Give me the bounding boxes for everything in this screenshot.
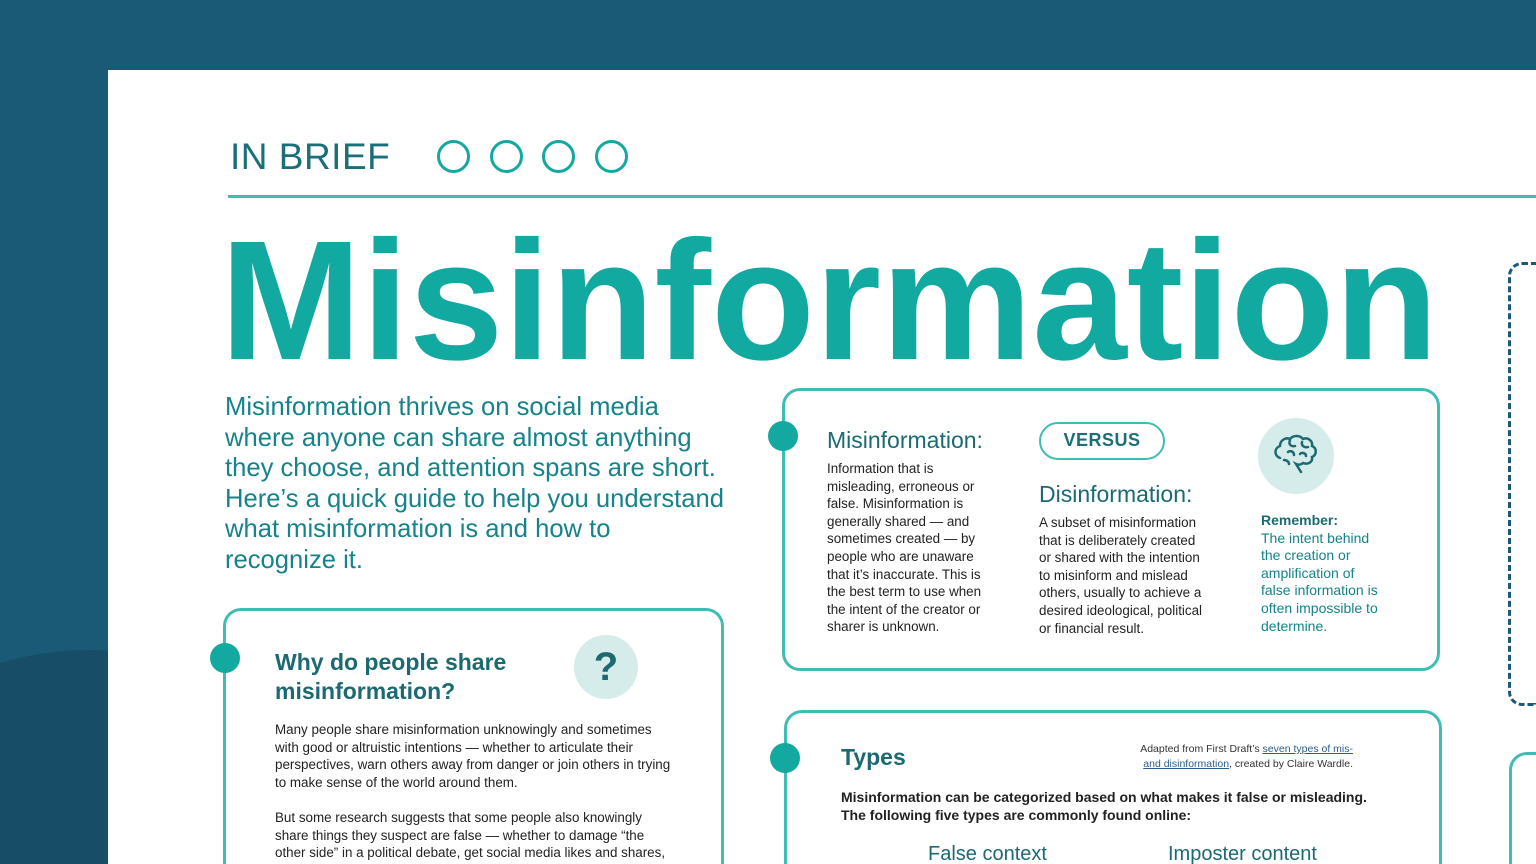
versus badge: VERSUS bbox=[1063, 430, 1141, 450]
disinformation definition: desired ideological, political bbox=[1039, 603, 1202, 618]
remember note: amplification of bbox=[1261, 565, 1354, 581]
header: in brief: IN BRIEF bbox=[230, 136, 390, 177]
misinformation definition: generally shared — and bbox=[827, 514, 969, 529]
text: other side” in a political debate, get social media likes and shares, bbox=[275, 845, 665, 860]
text: share things they suspect are false — whether to damage “the bbox=[275, 828, 644, 843]
panel: types bbox=[784, 710, 1442, 864]
text: Many people share misinformation unknowingly and sometimes bbox=[275, 722, 652, 737]
disinformation definition: or financial result. bbox=[1039, 621, 1144, 636]
intro: The following five types are commonly found online: bbox=[841, 807, 1191, 823]
misinformation definition: Misinformation: bbox=[827, 427, 983, 453]
misinformation definition: sometimes created — by bbox=[827, 531, 975, 546]
intro text: recognize it. bbox=[225, 546, 363, 574]
remember note: often impossible to bbox=[1261, 600, 1378, 616]
heading: Types bbox=[841, 744, 906, 770]
source note: and disinformation, created by Claire Wardle. bbox=[1143, 758, 1353, 770]
text: But some research suggests that some people also knowingly bbox=[275, 810, 642, 825]
misinformation definition bbox=[827, 427, 983, 634]
heading: Why do people share bbox=[275, 649, 506, 675]
heading bbox=[275, 649, 506, 704]
misinformation definition: misleading, erroneous or bbox=[827, 479, 974, 494]
intro text: what misinformation is and how to bbox=[225, 515, 611, 543]
panel: side lower bbox=[1509, 752, 1536, 864]
header: in brief bbox=[230, 136, 628, 177]
intro text: Here’s a quick guide to help you understand bbox=[225, 484, 724, 512]
intro text bbox=[225, 393, 724, 574]
text bbox=[275, 722, 670, 860]
title: Misinformation bbox=[220, 206, 1438, 396]
text: perspectives, warn others away from danger or join others in trying bbox=[275, 757, 670, 772]
misinformation definition: people who are unaware bbox=[827, 549, 974, 564]
disinformation definition bbox=[1039, 481, 1202, 636]
remember note: the creation or bbox=[1261, 547, 1350, 563]
disinformation definition: others, usually to achieve a bbox=[1039, 585, 1201, 600]
disinformation definition: to misinform and mislead bbox=[1039, 568, 1188, 583]
remember note bbox=[1261, 512, 1378, 634]
intro: Misinformation can be categorized based on what makes it false or misleading. bbox=[841, 789, 1367, 805]
misinformation definition: Information that is bbox=[827, 461, 933, 476]
panel: definitions bbox=[782, 388, 1440, 671]
heading: misinformation? bbox=[275, 678, 455, 704]
panel: why do people share bbox=[223, 608, 724, 864]
misinformation definition: sharer is unknown. bbox=[827, 619, 939, 634]
intro text: where anyone can share almost anything bbox=[225, 424, 692, 452]
remember note: false information is bbox=[1261, 582, 1378, 598]
misinformation definition: the best term to use when bbox=[827, 584, 981, 599]
remember note: determine. bbox=[1261, 618, 1327, 634]
intro text: Misinformation thrives on social media bbox=[225, 393, 659, 421]
panel: dashed side bbox=[1508, 262, 1536, 706]
icon: brain bbox=[1258, 418, 1334, 494]
disinformation definition: A subset of misinformation bbox=[1039, 515, 1196, 530]
text: to make sense of the world around them. bbox=[275, 775, 518, 790]
remember note: Remember: bbox=[1261, 512, 1338, 528]
misinformation definition: that it’s inaccurate. This is bbox=[827, 567, 981, 582]
intro text: they choose, and attention spans are short. bbox=[225, 454, 716, 482]
background curve bbox=[0, 650, 108, 864]
disinformation definition: or shared with the intention bbox=[1039, 550, 1200, 565]
versus badge bbox=[1039, 422, 1165, 460]
source note: Adapted from First Draft’s seven types of mis- bbox=[1140, 743, 1353, 755]
text: with good or altruistic intentions — whether to articulate their bbox=[275, 740, 633, 755]
disinformation definition: Disinformation: bbox=[1039, 481, 1192, 507]
icon: question: ? bbox=[594, 645, 618, 689]
icon: question bbox=[574, 635, 638, 699]
disinformation definition: that is deliberately created bbox=[1039, 533, 1195, 548]
source note bbox=[1140, 743, 1353, 770]
intro bbox=[841, 789, 1367, 823]
misinformation definition: the intent of the creator or bbox=[827, 602, 980, 617]
misinformation definition: false. Misinformation is bbox=[827, 496, 963, 511]
remember note: The intent behind bbox=[1261, 530, 1369, 546]
